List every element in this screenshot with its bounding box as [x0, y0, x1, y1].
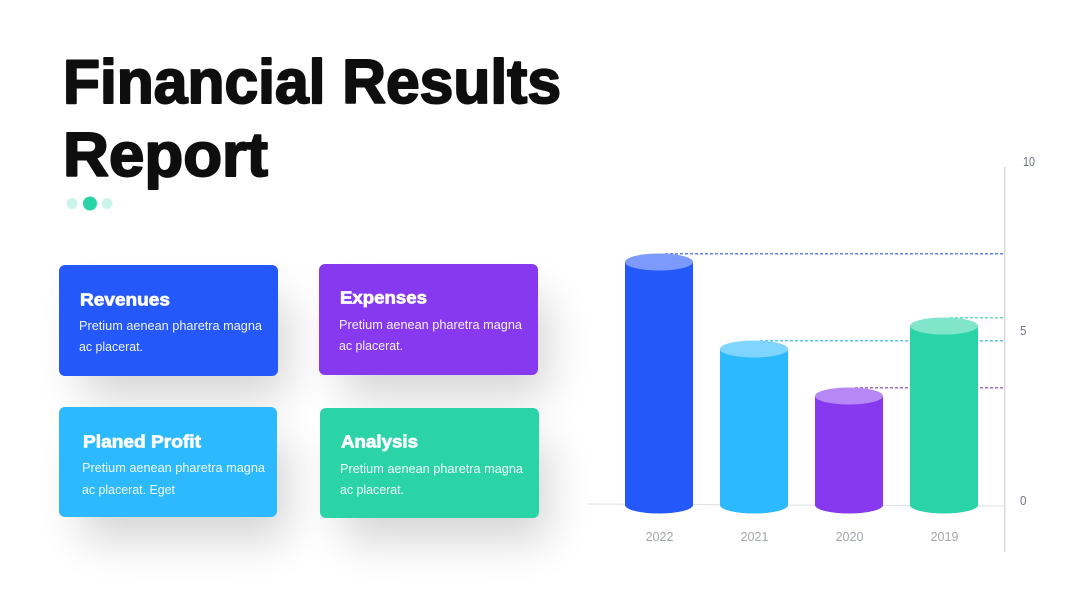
x axis labels: 2022	[646, 530, 673, 544]
text: revenues description	[79, 319, 262, 354]
panel: analysis	[320, 408, 539, 518]
y axis labels	[1020, 155, 1035, 508]
text: expenses description: ac placerat.	[339, 339, 403, 353]
text: revenues description: Pretium aenean pharetra magna	[79, 319, 262, 333]
bar: 2019	[910, 318, 978, 514]
heading: expenses: Expenses	[340, 288, 427, 308]
text: planed profit description	[82, 461, 265, 497]
x axis labels: 2019	[931, 530, 958, 544]
title: Financial Results	[63, 48, 561, 117]
title	[63, 48, 561, 190]
text: expenses description	[339, 318, 522, 353]
y axis labels: 10	[1023, 155, 1035, 169]
y axis labels: 5	[1020, 324, 1027, 338]
bar chart	[587, 155, 1035, 552]
heading: analysis: Analysis	[341, 432, 418, 452]
title: Report	[63, 121, 268, 190]
x axis labels: 2020	[836, 530, 863, 544]
panel: revenues	[59, 265, 278, 376]
heading: planed profit: Planed Profit	[83, 432, 201, 452]
bar: 2021	[720, 340, 788, 514]
bar: 2022	[625, 254, 693, 514]
icon: pagination dots	[66, 196, 112, 210]
text: planed profit description: Pretium aenean pharetra magna	[82, 461, 265, 475]
x axis labels: 2021	[741, 530, 768, 544]
text: expenses description: Pretium aenean pharetra magna	[339, 318, 522, 332]
heading: revenues: Revenues	[80, 290, 170, 310]
panel: planed profit	[59, 407, 277, 517]
text: analysis description	[340, 462, 523, 497]
text: analysis description: ac placerat.	[340, 483, 404, 497]
y axis labels: 0	[1020, 494, 1027, 508]
panel: expenses	[319, 264, 538, 375]
text: revenues description: ac placerat.	[79, 340, 143, 354]
bar: 2020	[815, 388, 883, 514]
text: analysis description: Pretium aenean pharetra magna	[340, 462, 523, 476]
x axis labels	[646, 530, 958, 544]
text: planed profit description: ac placerat. Eget	[82, 483, 176, 497]
